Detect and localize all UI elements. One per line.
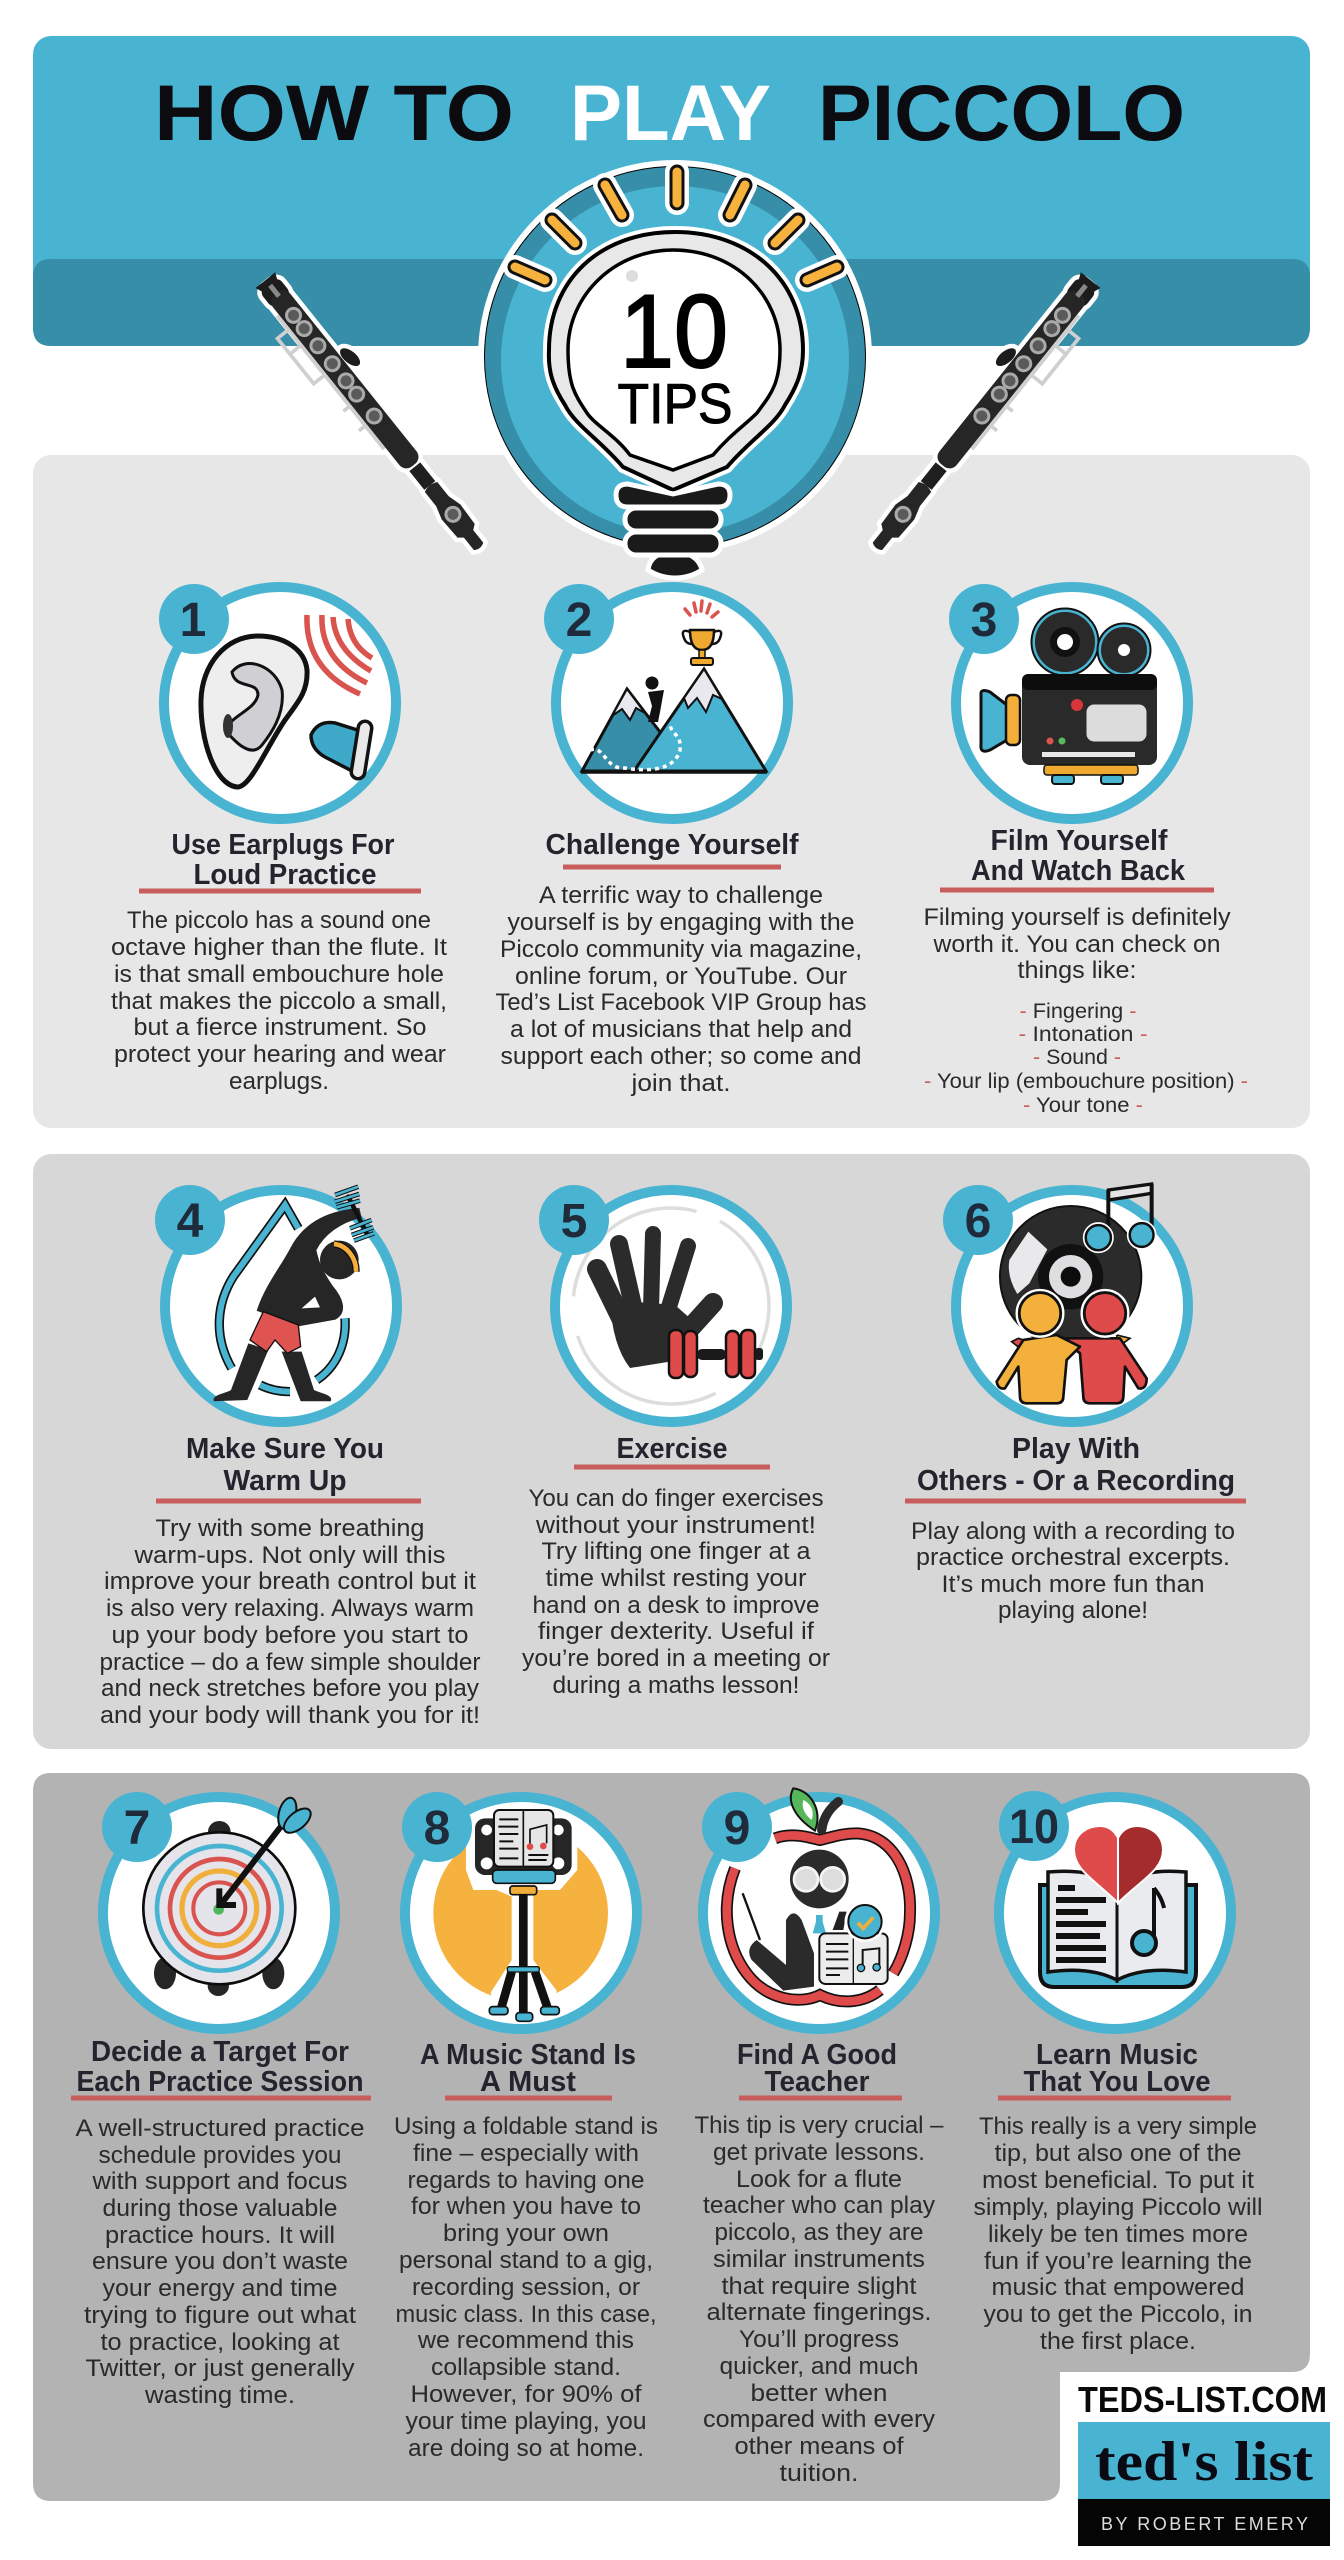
- tip 1: [111, 584, 447, 1095]
- body text: but a fierce instrument. So: [134, 1014, 426, 1041]
- tip 9: [694, 1788, 944, 2487]
- checklist: - Fingering -: [1020, 999, 1136, 1023]
- body text: are doing so at home.: [408, 2435, 644, 2462]
- body text: [76, 2115, 364, 2409]
- body text: A well-structured practice: [76, 2115, 364, 2142]
- number badge: [949, 584, 1019, 654]
- tip 7: [71, 1792, 371, 2409]
- checklist: [924, 999, 1248, 1117]
- heading: [905, 1433, 1246, 1501]
- body text: Play along with a recording to: [911, 1518, 1235, 1545]
- body text: trying to figure out what: [84, 2302, 356, 2329]
- bulb glass: [549, 232, 803, 490]
- icon: light bulb with 10 tips: 10: [620, 274, 728, 390]
- body text: [394, 2113, 658, 2462]
- number badge: [102, 1792, 172, 1862]
- number badge: 2: [566, 594, 592, 647]
- body text: practice hours. It will: [105, 2222, 335, 2249]
- tip 4: [100, 1185, 480, 1729]
- body text: during a maths lesson!: [552, 1672, 800, 1699]
- body text: we recommend this: [417, 2327, 634, 2354]
- heading: Play With: [1012, 1433, 1140, 1465]
- heading: Teacher: [764, 2066, 870, 2098]
- body text: earplugs.: [229, 1068, 329, 1095]
- heading: Each Practice Session: [76, 2066, 364, 2098]
- body text: your time playing, you: [406, 2408, 646, 2435]
- number badge: 7: [124, 1802, 150, 1855]
- heading: Find A Good: [737, 2039, 897, 2071]
- heading: And Watch Back: [971, 855, 1185, 887]
- bulb rays: [515, 172, 837, 280]
- logo: ted's list: ted's list: [1095, 2431, 1313, 2493]
- body text: You’ll progress: [739, 2326, 899, 2353]
- icon: light bulb with 10 tips: [481, 163, 869, 578]
- heading: [940, 825, 1214, 890]
- icon: stretching figure: [165, 1187, 397, 1422]
- icon: ear and earplug: [164, 587, 396, 819]
- tip 5: [522, 1172, 830, 1699]
- heading: [998, 2039, 1231, 2098]
- body text: that makes the piccolo a small,: [111, 988, 447, 1015]
- body text: The piccolo has a sound one: [127, 907, 431, 934]
- number badge: [702, 1792, 772, 1862]
- body text: Piccolo community via magazine,: [500, 936, 862, 963]
- body text: tip, but also one of the: [994, 2140, 1242, 2167]
- body text: fine – especially with: [413, 2140, 639, 2167]
- body text: you to get the Piccolo, in: [984, 2301, 1252, 2328]
- icon: heart and music book: [999, 1797, 1231, 2029]
- heading: Learn Music: [1036, 2039, 1198, 2071]
- heading: That You Love: [1024, 2066, 1210, 2098]
- body text: music class. In this case,: [396, 2301, 656, 2328]
- title: PICCOLO: [818, 68, 1185, 157]
- number badge: 10: [1009, 1801, 1059, 1854]
- number badge: 1: [180, 594, 206, 647]
- body text: improve your breath control but it: [104, 1568, 476, 1595]
- body text: It’s much more fun than: [942, 1571, 1204, 1598]
- body text: is that small embouchure hole: [114, 961, 444, 988]
- heading: A Music Stand Is: [420, 2039, 636, 2071]
- heading: Make Sure You: [186, 1433, 384, 1465]
- body text: [496, 882, 866, 1097]
- body text: [974, 2113, 1262, 2355]
- body text: Twitter, or just generally: [86, 2355, 354, 2382]
- icon: light bulb with 10 tips: TIPS: [618, 372, 732, 436]
- icon: teacher inside apple: [703, 1788, 935, 2029]
- heading: Film Yourself: [990, 825, 1168, 857]
- body text: support each other; so come and: [500, 1043, 862, 1070]
- body text: personal stand to a gig,: [399, 2247, 653, 2274]
- heading: A Must: [480, 2066, 577, 2098]
- icon: film camera: [956, 587, 1188, 819]
- body text: online forum, or YouTube. Our: [515, 963, 847, 990]
- body text: time whilst resting your: [546, 1565, 807, 1592]
- checklist: - Sound -: [1033, 1045, 1121, 1069]
- heading: [420, 2039, 636, 2098]
- panel: tips 7-10 background: [33, 1773, 1310, 2501]
- number badge: [544, 584, 614, 654]
- body text: teacher who can play: [703, 2192, 935, 2219]
- title: PLAY: [570, 68, 771, 157]
- body text: music that empowered: [992, 2274, 1244, 2301]
- icon: climber and trophy on mountains: [556, 587, 788, 819]
- body text: [924, 904, 1230, 984]
- body text: [111, 907, 447, 1095]
- body text: octave higher than the flute. It: [111, 934, 447, 961]
- body text: without your instrument!: [535, 1512, 816, 1539]
- body text: protect your hearing and wear: [114, 1041, 446, 1068]
- body text: warm-ups. Not only will this: [133, 1542, 446, 1569]
- body text: yourself is by engaging with the: [508, 909, 854, 936]
- panel: tips 1-3 background: [33, 455, 1310, 1128]
- body text: Try with some breathing: [156, 1515, 424, 1542]
- body text: and your body will thank you for it!: [100, 1702, 480, 1729]
- panel: header banner: [33, 36, 1310, 346]
- heading: [156, 1433, 421, 1501]
- body text: worth it. You can check on: [932, 931, 1220, 958]
- body text: get private lessons.: [713, 2139, 925, 2166]
- icon: music stand: [405, 1797, 637, 2029]
- body text: with support and focus: [91, 2168, 348, 2195]
- body text: things like:: [1018, 957, 1136, 984]
- number badge: 4: [177, 1195, 204, 1248]
- body text: quicker, and much: [720, 2353, 918, 2380]
- number badge: [999, 1791, 1069, 1861]
- body text: similar instruments: [713, 2246, 925, 2273]
- bulb base: [616, 484, 730, 578]
- heading: Exercise: [616, 1433, 728, 1465]
- tip 3: [924, 584, 1248, 1117]
- body text: ensure you don’t waste: [92, 2248, 348, 2275]
- body text: Try lifting one finger at a: [542, 1538, 811, 1565]
- body text: practice orchestral excerpts.: [916, 1544, 1230, 1571]
- body text: tuition.: [780, 2460, 858, 2487]
- heading: Challenge Yourself: [546, 829, 799, 861]
- body text: Using a foldable stand is: [394, 2113, 658, 2140]
- body text: playing alone!: [998, 1597, 1148, 1624]
- body text: for when you have to: [411, 2193, 641, 2220]
- heading: Others - Or a Recording: [917, 1465, 1235, 1497]
- body text: the first place.: [1040, 2328, 1196, 2355]
- icon: target with dart: [103, 1796, 335, 2029]
- body text: finger dexterity. Useful if: [538, 1618, 814, 1645]
- body text: hand on a desk to improve: [532, 1592, 820, 1619]
- checklist: - Intonation -: [1018, 1022, 1148, 1046]
- body text: you’re bored in a meeting or: [522, 1645, 830, 1672]
- heading: Use Earplugs For: [172, 829, 394, 861]
- icon: left piccolo: [245, 265, 500, 565]
- body text: collapsible stand.: [431, 2354, 621, 2381]
- heading: Decide a Target For: [91, 2036, 349, 2068]
- heading: Warm Up: [224, 1465, 346, 1497]
- body text: and neck stretches before you play: [101, 1675, 479, 1702]
- body text: [694, 2112, 944, 2487]
- body text: Filming yourself is definitely: [924, 904, 1230, 931]
- logo: ted's list: BY ROBERT EMERY: [1101, 2514, 1308, 2534]
- heading: [71, 2036, 371, 2098]
- number badge: [943, 1185, 1013, 1255]
- number badge: 9: [724, 1802, 750, 1855]
- title: HOW TO: [154, 68, 514, 157]
- body text: Look for a flute: [736, 2166, 902, 2193]
- title: [154, 68, 1185, 157]
- heading: [737, 2039, 902, 2098]
- checklist: - Your lip (embouchure position) -: [924, 1069, 1248, 1093]
- icon: two friends with record and music note: [956, 1184, 1188, 1422]
- body text: [911, 1518, 1235, 1624]
- body text: [100, 1515, 480, 1729]
- body text: to practice, looking at: [100, 2329, 340, 2356]
- body text: regards to having one: [408, 2167, 644, 2194]
- body text: bring your own: [443, 2220, 609, 2247]
- body text: simply, playing Piccolo will: [974, 2194, 1262, 2221]
- body text: during those valuable: [102, 2195, 338, 2222]
- number badge: 3: [971, 594, 997, 647]
- number badge: [155, 1185, 225, 1255]
- body text: This really is a very simple: [979, 2113, 1257, 2140]
- body text: better when: [750, 2380, 888, 2407]
- tip 10: [974, 1791, 1262, 2355]
- body text: A terrific way to challenge: [539, 882, 823, 909]
- body text: is also very relaxing. Always warm: [106, 1595, 474, 1622]
- body text: likely be ten times more: [988, 2221, 1248, 2248]
- tip 8: [394, 1792, 658, 2462]
- number badge: [402, 1792, 472, 1862]
- tip 6: [905, 1184, 1246, 1624]
- logo: ted's list: [1078, 2379, 1330, 2546]
- body text: recording session, or: [412, 2274, 640, 2301]
- number badge: 8: [424, 1802, 450, 1855]
- body text: other means of: [734, 2433, 904, 2460]
- body text: wasting time.: [144, 2382, 295, 2409]
- number badge: [159, 584, 229, 654]
- number badge: 5: [561, 1195, 587, 1248]
- number badge: [539, 1185, 609, 1255]
- tip 2: [496, 584, 866, 1097]
- body text: compared with every: [703, 2406, 935, 2433]
- body text: You can do finger exercises: [528, 1485, 824, 1512]
- body text: This tip is very crucial –: [694, 2112, 944, 2139]
- checklist: - Your tone -: [1023, 1093, 1143, 1117]
- panel: tips 4-6 background: [33, 1154, 1310, 1749]
- body text: [522, 1485, 830, 1699]
- body text: up your body before you start to: [112, 1622, 468, 1649]
- icon: right piccolo: [856, 265, 1111, 565]
- body text: Ted’s List Facebook VIP Group has: [496, 989, 866, 1016]
- body text: a lot of musicians that help and: [510, 1016, 852, 1043]
- body text: most beneficial. To put it: [982, 2167, 1254, 2194]
- heading: Loud Practice: [194, 859, 376, 891]
- body text: alternate fingerings.: [706, 2299, 932, 2326]
- body text: fun if you’re learning the: [984, 2248, 1252, 2275]
- number badge: 6: [965, 1195, 991, 1248]
- body text: piccolo, as they are: [714, 2219, 924, 2246]
- icon: hand and dumbbell: [537, 1172, 805, 1440]
- body text: your energy and time: [102, 2275, 338, 2302]
- body text: join that.: [630, 1070, 730, 1097]
- body text: schedule provides you: [98, 2142, 342, 2169]
- body text: that require slight: [722, 2273, 917, 2300]
- body text: However, for 90% of: [410, 2381, 642, 2408]
- heading: [139, 829, 421, 891]
- body text: practice – do a few simple shoulder: [100, 1649, 480, 1676]
